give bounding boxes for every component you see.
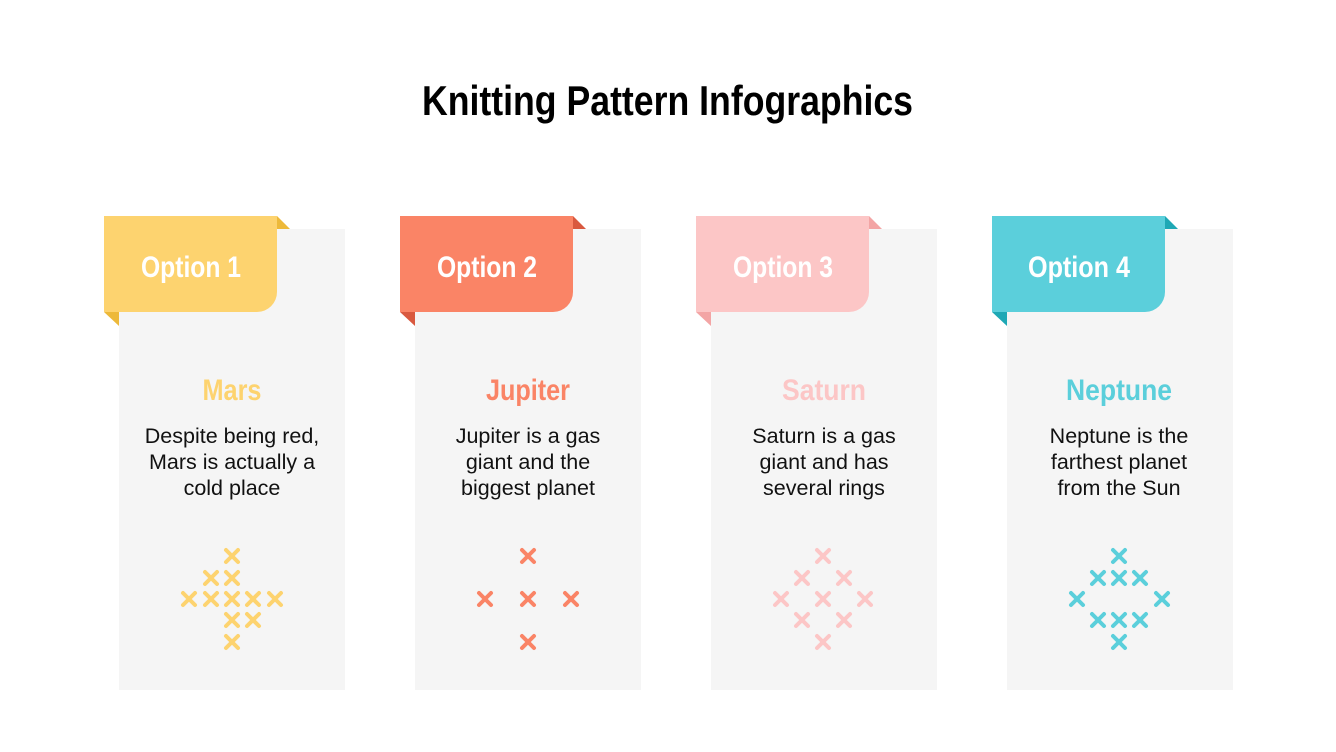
text: saturn description: giant and has	[759, 450, 889, 474]
pattern: neptune	[1071, 550, 1168, 648]
card background	[119, 229, 345, 690]
text: saturn description: Saturn is a gas	[752, 424, 896, 448]
heading: Neptune: Neptune	[1066, 374, 1172, 407]
text: neptune description: Neptune is the	[1050, 424, 1188, 448]
panel: option 1 mars	[104, 216, 345, 690]
text: jupiter description: Jupiter is a gas	[456, 424, 600, 448]
heading: Mars: Mars	[202, 374, 262, 407]
tab: option 4	[992, 216, 1178, 326]
text: neptune description: from the Sun	[1057, 476, 1181, 500]
panel: option 3 saturn	[696, 216, 937, 690]
tab: option 2: Option 2	[437, 251, 537, 284]
pattern: jupiter	[479, 550, 577, 648]
text: mars description: Mars is actually a	[149, 450, 315, 474]
title: Knitting Pattern Infographics	[422, 77, 913, 124]
text: saturn description: several rings	[763, 476, 885, 500]
text: jupiter description: giant and the	[466, 450, 590, 474]
tab: option 1	[104, 216, 290, 326]
card background	[711, 229, 937, 690]
heading: Jupiter: Jupiter	[486, 374, 570, 407]
panel: option 4 neptune	[992, 216, 1233, 690]
text: mars description: cold place	[184, 476, 280, 500]
pattern: mars	[183, 550, 281, 648]
text: mars description: Despite being red,	[145, 424, 319, 448]
card background	[1007, 229, 1233, 690]
tab: option 1: Option 1	[141, 251, 241, 284]
text: jupiter description: biggest planet	[461, 476, 595, 500]
pattern: saturn	[775, 550, 871, 648]
tab: option 3: Option 3	[733, 251, 833, 284]
tab: option 3	[696, 216, 882, 326]
tab: option 4: Option 4	[1028, 251, 1130, 284]
text: neptune description: farthest planet	[1051, 450, 1187, 474]
card background	[415, 229, 641, 690]
tab: option 2	[400, 216, 586, 326]
heading: Saturn: Saturn	[782, 374, 866, 407]
panel: option 2 jupiter	[400, 216, 641, 690]
